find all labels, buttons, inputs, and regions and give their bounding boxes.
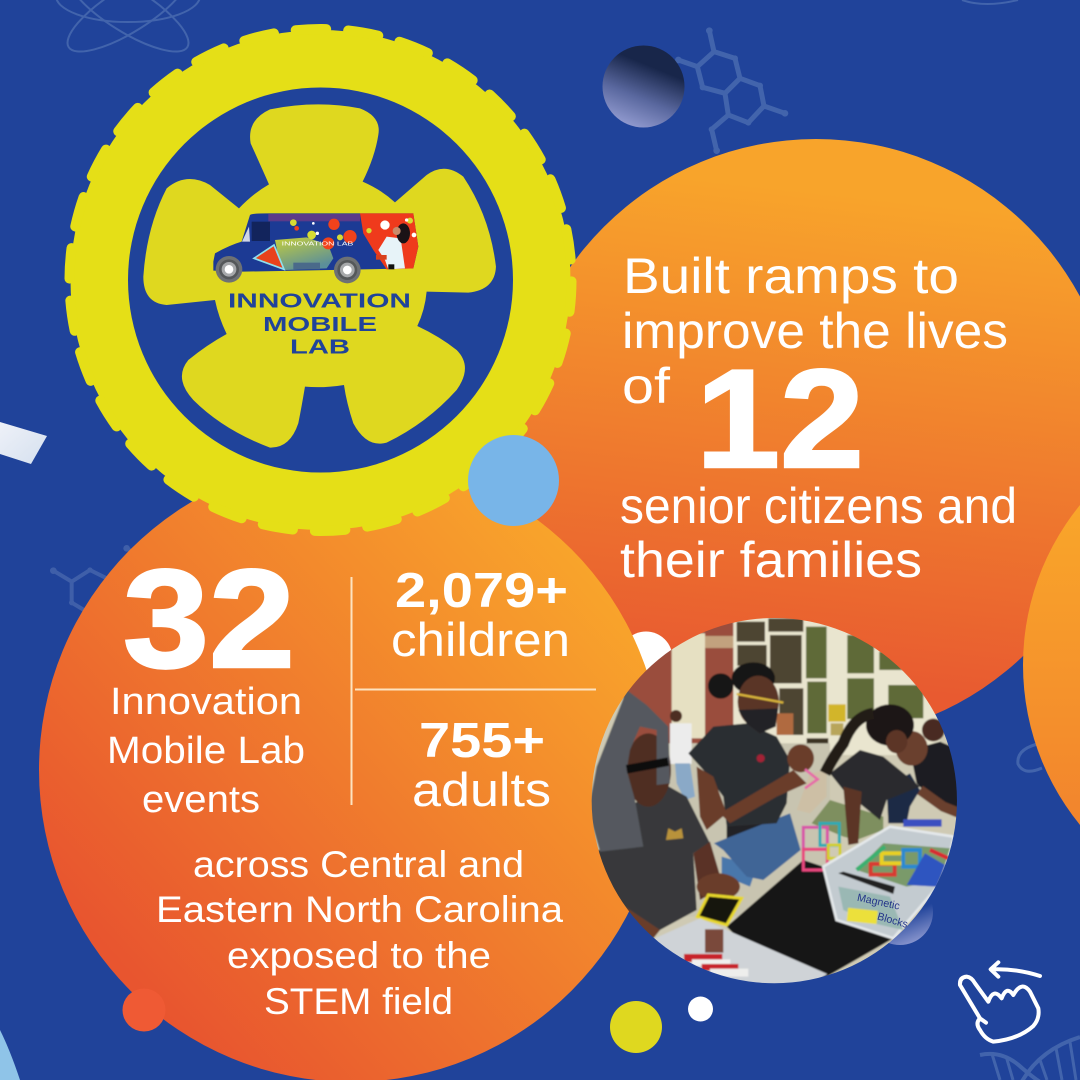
background icon: atom fragment right	[1018, 743, 1042, 771]
bin label handwriting: Magnetic	[856, 892, 901, 913]
logo text: LAB	[290, 336, 350, 358]
panel: events circle	[39, 458, 663, 1080]
text: region line 2: Eastern North Carolina	[156, 889, 563, 930]
background icon: DNA strand	[980, 1037, 1080, 1080]
bin label handwriting	[858, 894, 908, 928]
right student	[812, 704, 920, 845]
text: region line 4: STEM field	[264, 981, 453, 1022]
right edge orange circle	[1023, 412, 1080, 918]
stat: children count: 2,079+	[395, 564, 568, 618]
middle student	[688, 662, 818, 887]
text: adults: adults	[412, 763, 551, 816]
text: Innovation: Innovation	[110, 681, 302, 723]
text: events: events	[142, 779, 260, 821]
background icon: flask fragment bottom left	[0, 1030, 20, 1080]
white small circle	[688, 996, 713, 1022]
logo text	[228, 290, 411, 358]
background icon: atom fragment top right	[962, 0, 1018, 4]
text: children: children	[391, 613, 570, 666]
white circle	[620, 632, 672, 684]
panel: ramps circle	[516, 139, 1080, 739]
background icon: flask fragment left	[0, 422, 47, 464]
logo text: MOBILE	[263, 313, 377, 336]
background icon: atom top left	[56, 0, 200, 66]
logo: tire badge	[68, 28, 573, 532]
table	[727, 860, 893, 983]
text: Mobile Lab: Mobile Lab	[107, 730, 305, 772]
light blue circle	[468, 435, 559, 526]
magnetic cube stack	[803, 823, 840, 870]
red circle	[122, 988, 166, 1032]
stat: adults count: 755+	[419, 714, 545, 768]
illustration: lab bus	[213, 213, 418, 283]
logo text: INNOVATION	[228, 290, 411, 312]
stat: 12 seniors: 12	[696, 340, 864, 497]
icon: swipe hand	[960, 962, 1040, 1042]
stat: 32 events: 32	[123, 540, 295, 697]
text: ramps line 1: Built ramps to	[623, 248, 959, 304]
background icon: molecule left	[50, 545, 140, 612]
yellow cube	[697, 895, 742, 925]
bottom bin of bricks	[655, 918, 827, 985]
background student	[670, 710, 695, 800]
text: region line 3: exposed to the	[227, 935, 491, 976]
backpack	[798, 772, 826, 812]
photo: students building with magnetic blocks	[587, 610, 970, 990]
yellow circle	[610, 1001, 662, 1053]
far right students	[887, 719, 960, 827]
right bin of magnetic tiles	[823, 827, 954, 938]
background icon: molecule top	[675, 27, 788, 154]
illustration: lab bus: INNOVATION LAB	[282, 241, 354, 247]
text: ramps line 4: their families	[620, 532, 922, 588]
text: of: of	[622, 358, 670, 414]
bin label handwriting: Blocks	[876, 911, 909, 931]
text: ramps line 2: improve the lives	[622, 303, 1008, 359]
text: region line 1: across Central and	[193, 844, 524, 885]
small gradient circle behind photo	[867, 879, 933, 945]
hub shape	[143, 104, 496, 448]
dark gradient circle	[602, 46, 684, 128]
text: ramps line 3: senior citizens and	[620, 478, 1017, 534]
left student	[587, 690, 740, 938]
